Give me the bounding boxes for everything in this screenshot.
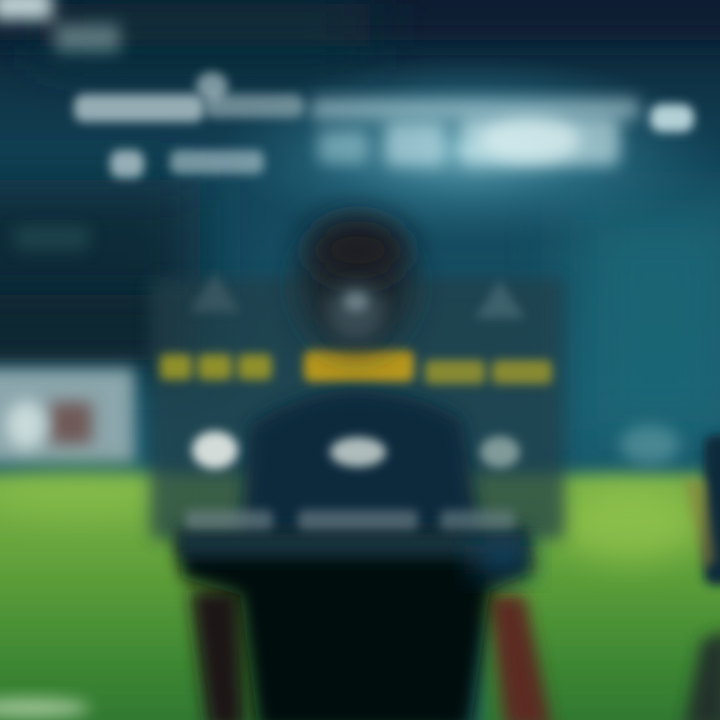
grandstand at left xyxy=(0,368,135,463)
blurred title block xyxy=(74,72,694,178)
dark stat panel xyxy=(150,272,565,540)
partial player at right edge xyxy=(684,435,720,720)
player torso xyxy=(240,390,482,540)
grey caption row xyxy=(185,510,515,530)
faint side label xyxy=(14,226,90,250)
player shorts xyxy=(178,535,532,720)
green football pitch xyxy=(0,425,720,720)
player head xyxy=(300,219,412,351)
blurred corner label xyxy=(0,0,120,52)
central player xyxy=(178,219,552,720)
icon: left stat xyxy=(190,272,240,312)
icon: right stat xyxy=(475,280,525,318)
white stat values xyxy=(192,431,520,469)
yellow heading row xyxy=(160,350,552,384)
player legs and arms xyxy=(190,590,552,720)
